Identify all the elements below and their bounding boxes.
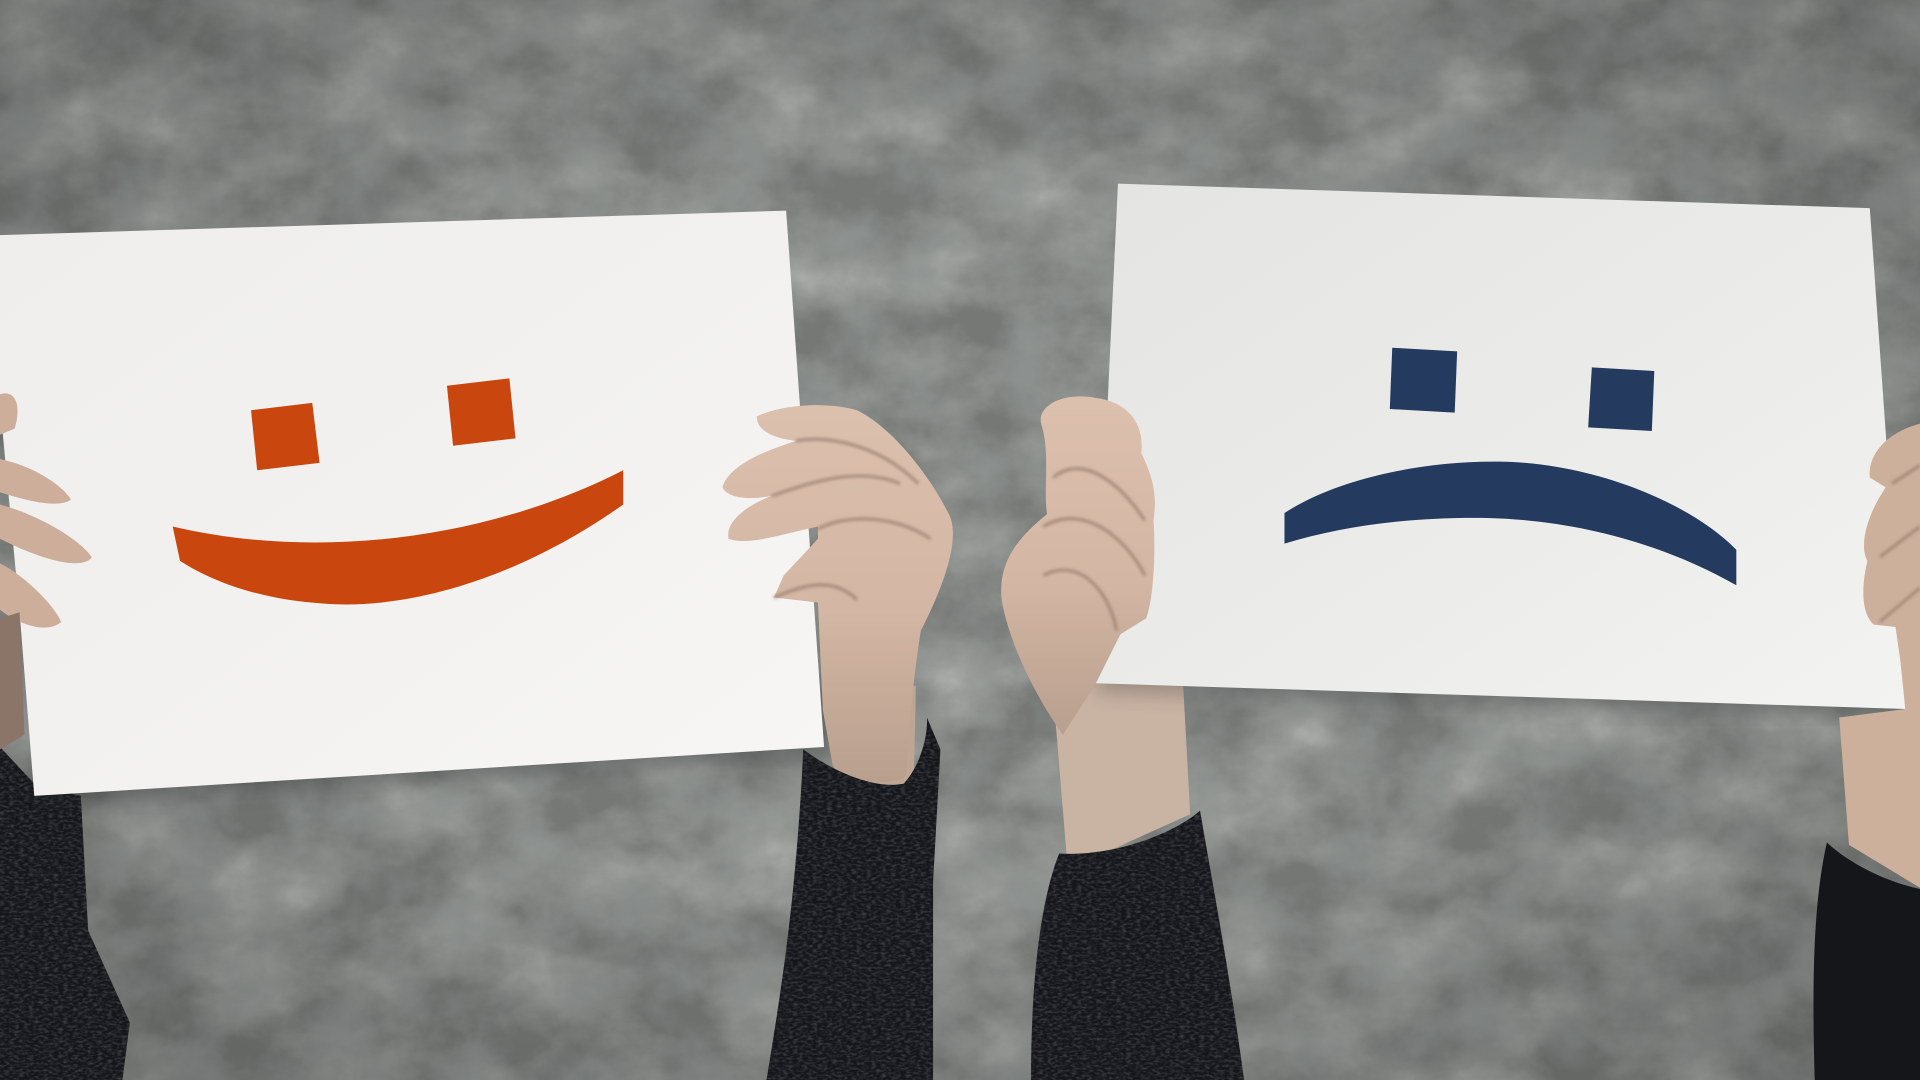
icon: left eye <box>251 403 320 470</box>
paper shadow: right sheet <box>1096 637 1905 718</box>
right person's right sleeve <box>1813 842 1920 1080</box>
left person's left hand <box>0 393 92 749</box>
icon: frown <box>1284 462 1736 585</box>
right person's left arm and sleeve <box>1031 661 1244 1080</box>
left paper sheet <box>0 211 824 796</box>
right person's right hand and arm <box>1839 424 1920 888</box>
right person's left hand, fingers in front of the sheet <box>1001 396 1155 735</box>
sad face <box>1284 348 1736 585</box>
icon: smile <box>173 470 623 604</box>
icon: right eye <box>447 378 516 446</box>
icon: left eye <box>1390 348 1457 413</box>
happy face <box>173 378 623 604</box>
left person's right hand <box>722 405 953 782</box>
left person's right arm and sleeve <box>767 686 940 1080</box>
right paper sheet <box>1096 184 1905 709</box>
paper shadow: left sheet <box>37 686 845 803</box>
icon: right eye <box>1588 367 1654 431</box>
left person's left sleeve <box>0 747 130 1080</box>
